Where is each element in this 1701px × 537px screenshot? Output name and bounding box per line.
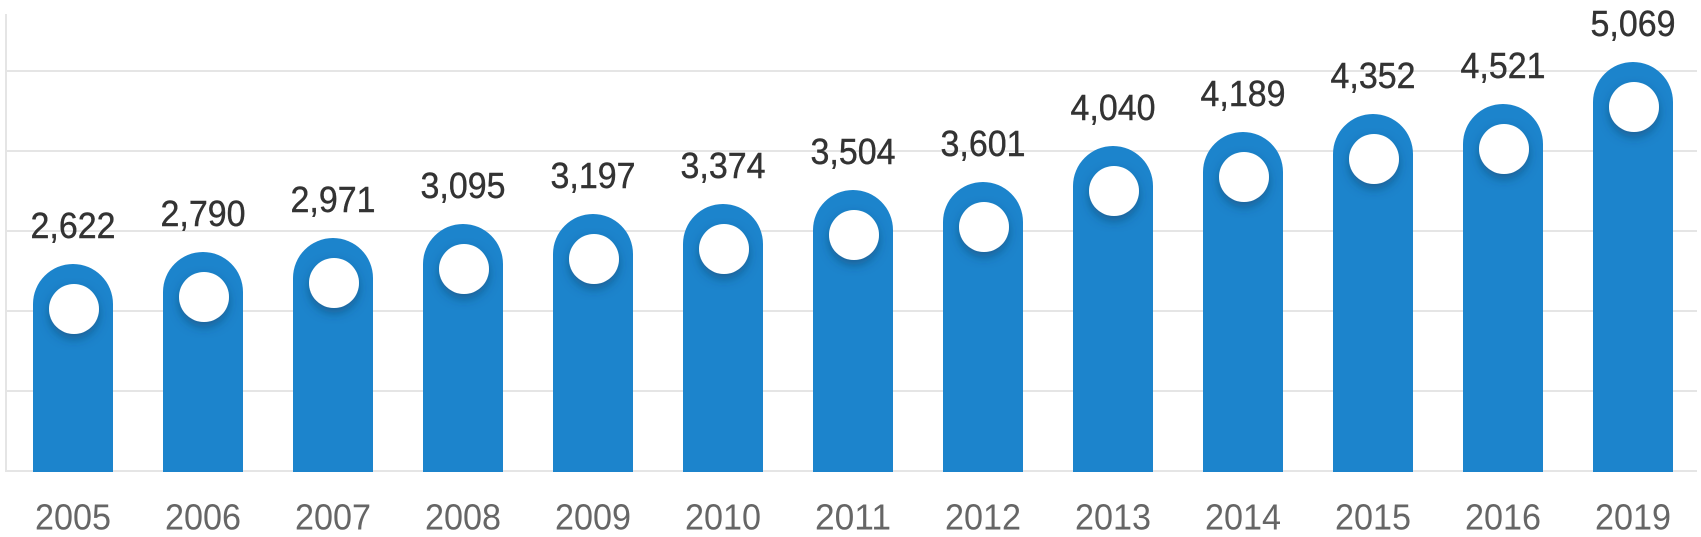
bar: 2009: 3,197: [550, 155, 636, 196]
bar: 2009: 2009: [555, 496, 631, 537]
bar: 2019: 5,069: [1590, 3, 1676, 44]
bar: 2008: 3,095: [420, 165, 506, 206]
bar: 2013: [1070, 87, 1156, 537]
bar: 2005: 2,622: [30, 205, 116, 246]
bar: 2008: [420, 165, 506, 537]
bar: 2011: [810, 131, 896, 537]
bar: 2007: [290, 179, 376, 537]
bar: 2014: 4,189: [1200, 73, 1286, 114]
bar: 2015: 4,352: [1330, 55, 1416, 96]
bar: 2006: 2006: [165, 496, 241, 537]
bar: 2013: 4,040: [1070, 87, 1156, 128]
bar: 2006: [160, 193, 246, 537]
bar: 2010: 3,374: [680, 145, 766, 186]
bar: 2015: [1330, 55, 1416, 537]
bar: 2009: [550, 155, 636, 537]
bar: 2006: 2,790: [160, 193, 246, 234]
bar: 2013: 2013: [1075, 496, 1151, 537]
bar: 2014: 2014: [1205, 496, 1281, 537]
bar: 2014: [1200, 73, 1286, 537]
bar: 2019: [1590, 3, 1676, 537]
bar: 2011: 3,504: [810, 131, 896, 172]
bar: 2007: 2,971: [290, 179, 376, 220]
bar: 2011: 2011: [815, 496, 891, 537]
bar: 2005: [30, 205, 116, 537]
bar: 2019: 2019: [1595, 496, 1671, 537]
bar: 2012: [940, 123, 1026, 537]
bar: 2012: 2012: [945, 496, 1021, 537]
bar: 2005: 2005: [35, 496, 111, 537]
bar: 2016: [1460, 45, 1546, 537]
bar: 2012: 3,601: [940, 123, 1026, 164]
bar: 2010: [680, 145, 766, 537]
bar: 2007: 2007: [295, 496, 371, 537]
bar: 2015: 2015: [1335, 496, 1411, 537]
bar: 2016: 4,521: [1460, 45, 1546, 86]
bar: 2008: 2008: [425, 496, 501, 537]
bar: 2016: 2016: [1465, 496, 1541, 537]
bar: 2010: 2010: [685, 496, 761, 537]
